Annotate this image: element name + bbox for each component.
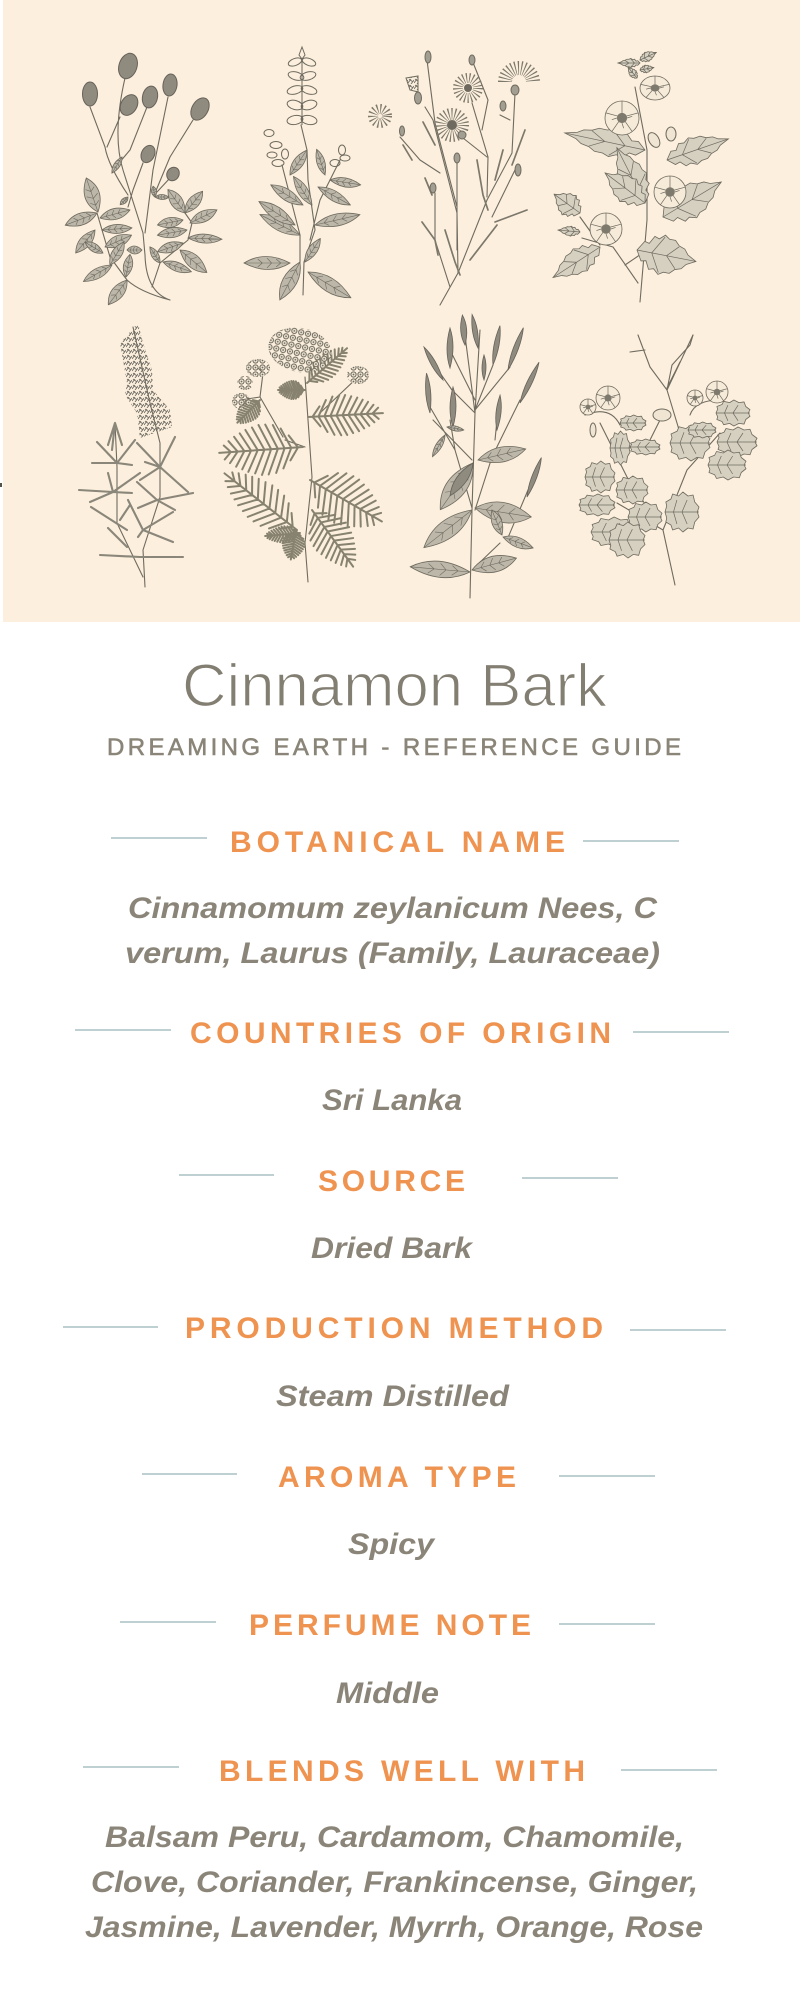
panel background	[3, 0, 800, 622]
text: blends well with value: Balsam Peru, Cardamom, Chamomile,	[105, 1821, 684, 1854]
subtitle: DREAMING EARTH - REFERENCE GUIDE	[107, 734, 681, 761]
text: source value: Dried Bark	[311, 1232, 473, 1265]
text: perfume note value: Middle	[336, 1677, 439, 1710]
illustration: tansy plant with feathered leaves	[212, 322, 394, 582]
section heading: production method: PRODUCTION METHOD	[185, 1312, 603, 1345]
illustration: burnet plant with oval seed heads	[63, 51, 222, 308]
text: blends well with value: Clove, Coriander, Frankincense, Ginger,	[91, 1866, 698, 1899]
text: blends well with value: Jasmine, Lavender, Myrrh, Orange, Rose	[85, 1911, 703, 1944]
illustration: cornflower plant	[373, 51, 533, 305]
text: botanical name value: Cinnamomum zeylanicum Nees, C	[128, 892, 658, 925]
text: botanical name value	[125, 892, 660, 970]
section heading: perfume note: PERFUME NOTE	[249, 1609, 531, 1642]
illustration: mallow plant with broad leaves	[546, 48, 733, 302]
panel: botanical illustrations	[3, 0, 800, 622]
section heading: blends well with: BLENDS WELL WITH	[219, 1755, 585, 1788]
illustration: celandine plant with lobed leaves	[579, 335, 757, 585]
text: blends well with value	[85, 1821, 703, 1944]
section heading: botanical name: BOTANICAL NAME	[230, 826, 565, 859]
text: aroma type value: Spicy	[348, 1528, 435, 1561]
section heading: source: SOURCE	[318, 1165, 465, 1198]
text: botanical name value: verum, Laurus (Family, Lauraceae)	[125, 937, 660, 970]
text: countries value: Sri Lanka	[322, 1084, 462, 1117]
title: Cinnamon Bark	[182, 652, 608, 719]
section heading: aroma type: AROMA TYPE	[278, 1461, 516, 1494]
illustration: sage plant with flower spike	[244, 47, 361, 304]
illustration: vervain plant with flower spikes	[410, 314, 544, 598]
text: production method value: Steam Distilled	[276, 1380, 510, 1413]
section heading: countries of origin: COUNTRIES OF ORIGIN	[190, 1017, 611, 1050]
edge mark left	[0, 483, 2, 487]
illustration: savory plant with narrow leaves	[79, 323, 193, 587]
